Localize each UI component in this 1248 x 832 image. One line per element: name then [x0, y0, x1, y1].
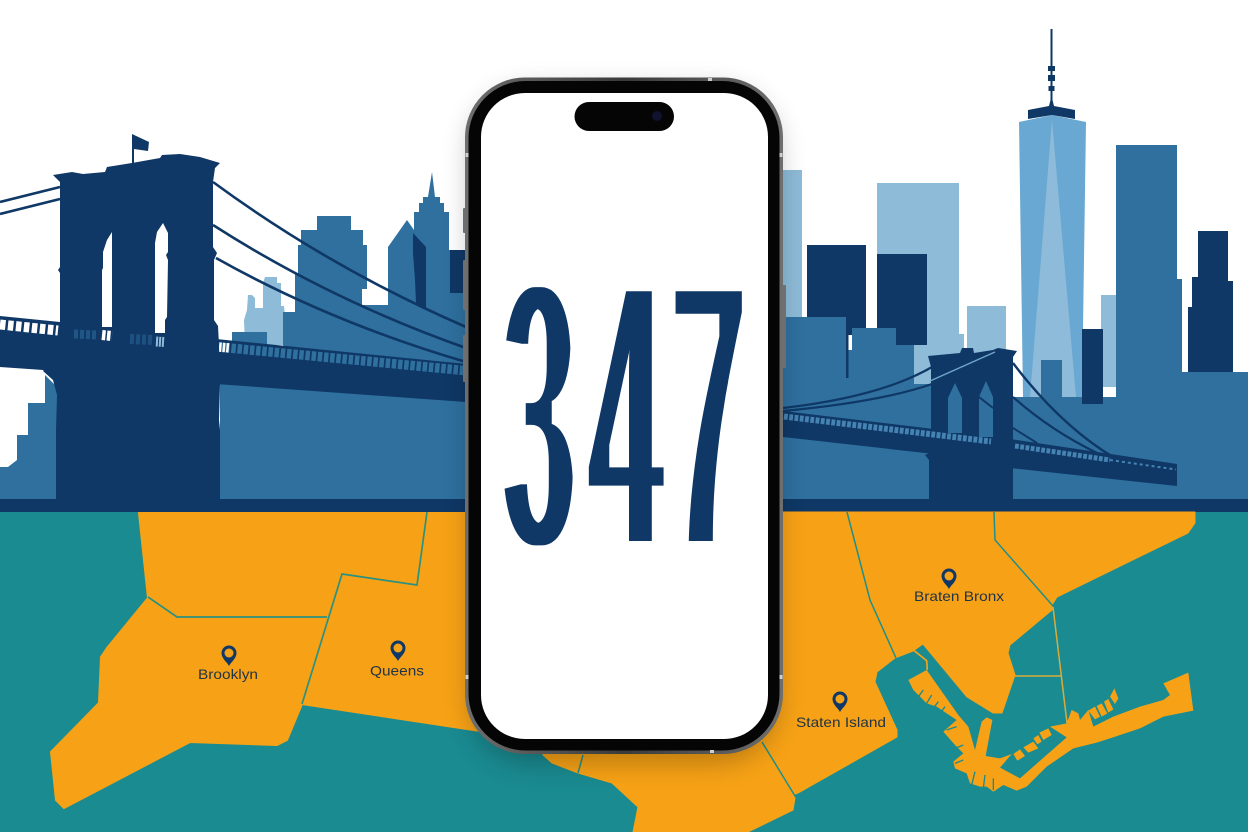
label: Braten Bronx	[914, 588, 1004, 604]
screen	[481, 93, 768, 739]
pin	[832, 692, 848, 712]
Queens marker	[370, 640, 424, 678]
label: Queens	[370, 662, 424, 678]
camera lens	[652, 111, 662, 121]
bezel	[468, 81, 780, 750]
label: Brooklyn	[198, 666, 258, 682]
antenna ticks	[466, 78, 782, 753]
pale buildings	[780, 170, 1117, 388]
tower arches	[102, 232, 112, 327]
left stepped buildings	[0, 375, 57, 499]
left railing	[0, 324, 58, 330]
waterfront mass	[220, 380, 466, 499]
area code number: 347	[503, 196, 744, 637]
mid-blue ground and tall building	[780, 145, 1248, 499]
dark stepped tower	[1188, 231, 1233, 372]
arches	[948, 383, 962, 433]
map panel	[0, 512, 1248, 832]
highlight cable on tower	[930, 352, 995, 381]
left borough borders	[148, 512, 427, 704]
right railing	[219, 347, 464, 370]
outer frame	[465, 78, 783, 754]
flag	[132, 134, 149, 165]
phone shadow	[470, 90, 778, 762]
pin	[222, 646, 236, 666]
right deck	[216, 339, 466, 402]
One World Trade tower	[1019, 29, 1086, 398]
dark tower facet	[413, 233, 426, 308]
harbour comb shape	[908, 650, 1193, 792]
Brooklyn marker	[198, 646, 258, 682]
right deck	[1010, 439, 1177, 486]
smartphone	[463, 78, 786, 762]
railings	[784, 416, 991, 442]
mid-blue towers	[283, 172, 465, 367]
left skyline	[0, 172, 466, 499]
right borough borders	[578, 512, 1053, 796]
large Brooklyn Bridge, left	[0, 134, 466, 499]
dynamic island	[574, 102, 674, 131]
tower	[43, 154, 220, 499]
water	[0, 512, 1248, 832]
dark buildings	[807, 245, 866, 335]
small mid block	[232, 332, 267, 344]
cables	[783, 363, 1177, 467]
small bridge, right	[783, 348, 1177, 499]
left boroughs landmass	[51, 513, 480, 808]
pin	[942, 568, 956, 589]
Staten Island marker	[796, 692, 886, 730]
tower deck windows	[74, 334, 97, 335]
pin	[390, 640, 406, 661]
dark slab	[1082, 329, 1103, 404]
Braten Bronx marker	[914, 568, 1004, 604]
left deck	[0, 316, 60, 372]
left deck	[783, 411, 992, 460]
harbour lines	[1015, 607, 1067, 723]
narrow dark slit	[846, 335, 848, 378]
tower	[925, 348, 1017, 499]
navy waterline band	[0, 499, 1248, 512]
right boroughs landmass	[543, 512, 1195, 832]
light building	[244, 277, 286, 345]
suspension cables	[0, 182, 466, 362]
side buttons	[463, 208, 786, 382]
label: Staten Island	[796, 714, 886, 730]
right skyline	[780, 29, 1248, 499]
dark square building	[450, 250, 466, 293]
